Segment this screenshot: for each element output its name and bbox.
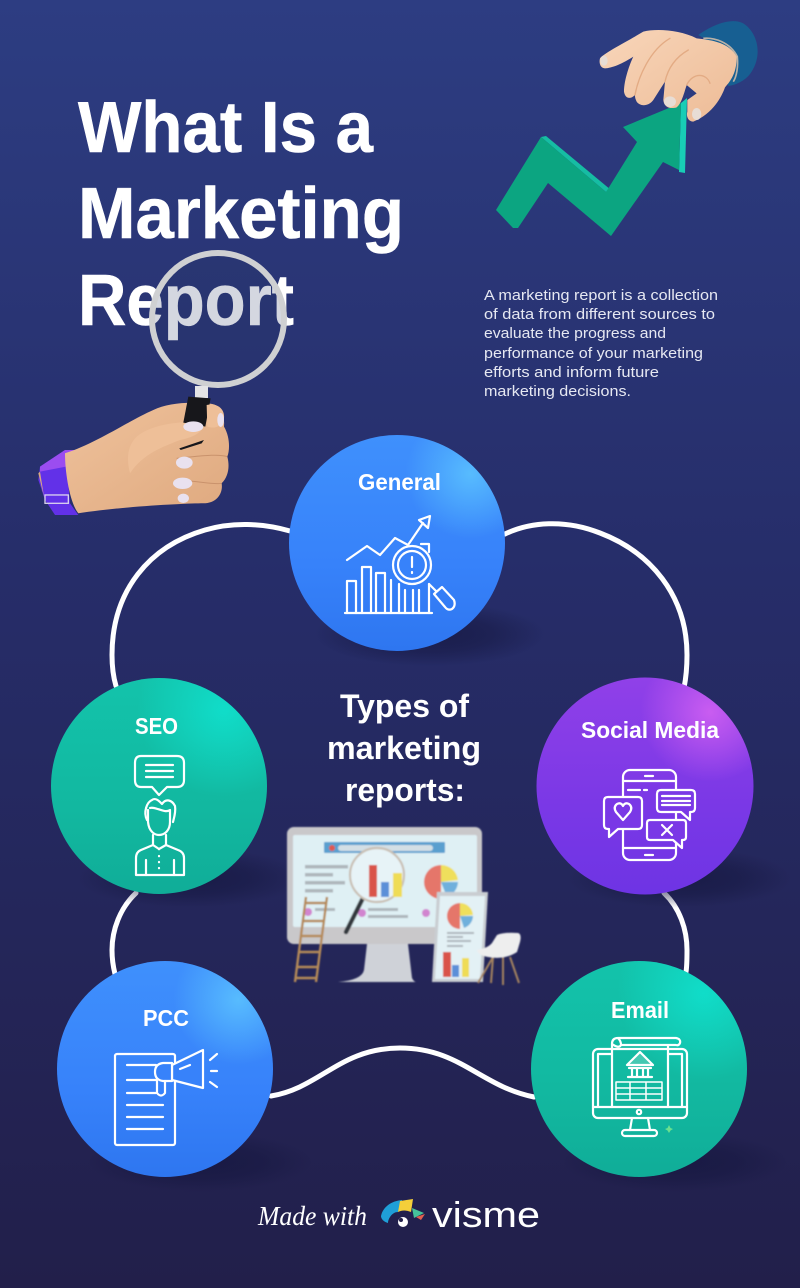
- nails: [600, 56, 701, 120]
- nails: [173, 413, 224, 503]
- illustration: dashboard on monitor and tablet: [287, 827, 521, 985]
- illustration: hand pulling arrow: [600, 21, 758, 122]
- title: Report: [78, 261, 294, 341]
- icon: green sparkle: [665, 1125, 673, 1133]
- hand: [65, 397, 229, 513]
- icon: phone with message bubbles: [604, 770, 695, 860]
- connecting loop line: [112, 524, 687, 1097]
- node: General: General: [358, 469, 441, 495]
- node: PCC: PCC: [143, 1005, 189, 1031]
- node: SEO: SEO: [135, 713, 178, 739]
- intro paragraph: of data from different sources to: [484, 307, 715, 323]
- illustration: green rising arrow: [496, 98, 687, 236]
- center heading: [327, 688, 481, 808]
- icon: monitor with bank statement: [593, 1038, 687, 1136]
- pie on screen: [424, 865, 441, 899]
- magnifier on screen: [346, 898, 363, 932]
- node: Email: [531, 961, 787, 1192]
- illustration: hand with magnifying glass: [38, 253, 284, 515]
- intro paragraph: performance of your marketing: [484, 346, 703, 362]
- ladder: [295, 897, 327, 982]
- footer: Made with Visme: visme: [432, 1194, 540, 1235]
- watch strap: [38, 450, 78, 515]
- footer: Made with Visme: Made with: [257, 1201, 367, 1231]
- center heading: reports:: [345, 772, 465, 808]
- node: Email: Email: [611, 997, 669, 1023]
- lens: [152, 253, 284, 385]
- intro paragraph: efforts and inform future: [484, 365, 659, 381]
- monitor stand: [338, 944, 416, 982]
- node: General: [289, 435, 545, 666]
- icon: person with speech bubble: [135, 756, 184, 875]
- hand shape: [600, 30, 737, 122]
- intro paragraph: marketing decisions.: [484, 384, 631, 400]
- center heading: marketing: [327, 730, 481, 766]
- icon: document with megaphone: [115, 1050, 217, 1145]
- intro paragraph: evaluate the progress and: [484, 326, 666, 342]
- tablet: [432, 892, 488, 982]
- node: SEO: [51, 678, 302, 908]
- intro paragraph: [484, 288, 718, 400]
- chair: [478, 957, 519, 985]
- title: What Is a: [78, 88, 374, 168]
- intro paragraph: A marketing report is a collection: [484, 288, 718, 304]
- node: Social Media: [536, 678, 792, 908]
- monitor: [287, 827, 482, 944]
- finger creases: [635, 38, 710, 95]
- footer: Made with Visme: [257, 1194, 540, 1235]
- cuff: [698, 21, 758, 86]
- title: Marketing: [78, 174, 404, 254]
- icon: chart with magnifier: [345, 516, 455, 613]
- center heading: Types of: [340, 688, 469, 724]
- node: PCC: [57, 961, 312, 1192]
- node: Social Media: Social Media: [581, 717, 719, 743]
- title: [78, 88, 404, 341]
- icon: visme logo: [381, 1199, 425, 1227]
